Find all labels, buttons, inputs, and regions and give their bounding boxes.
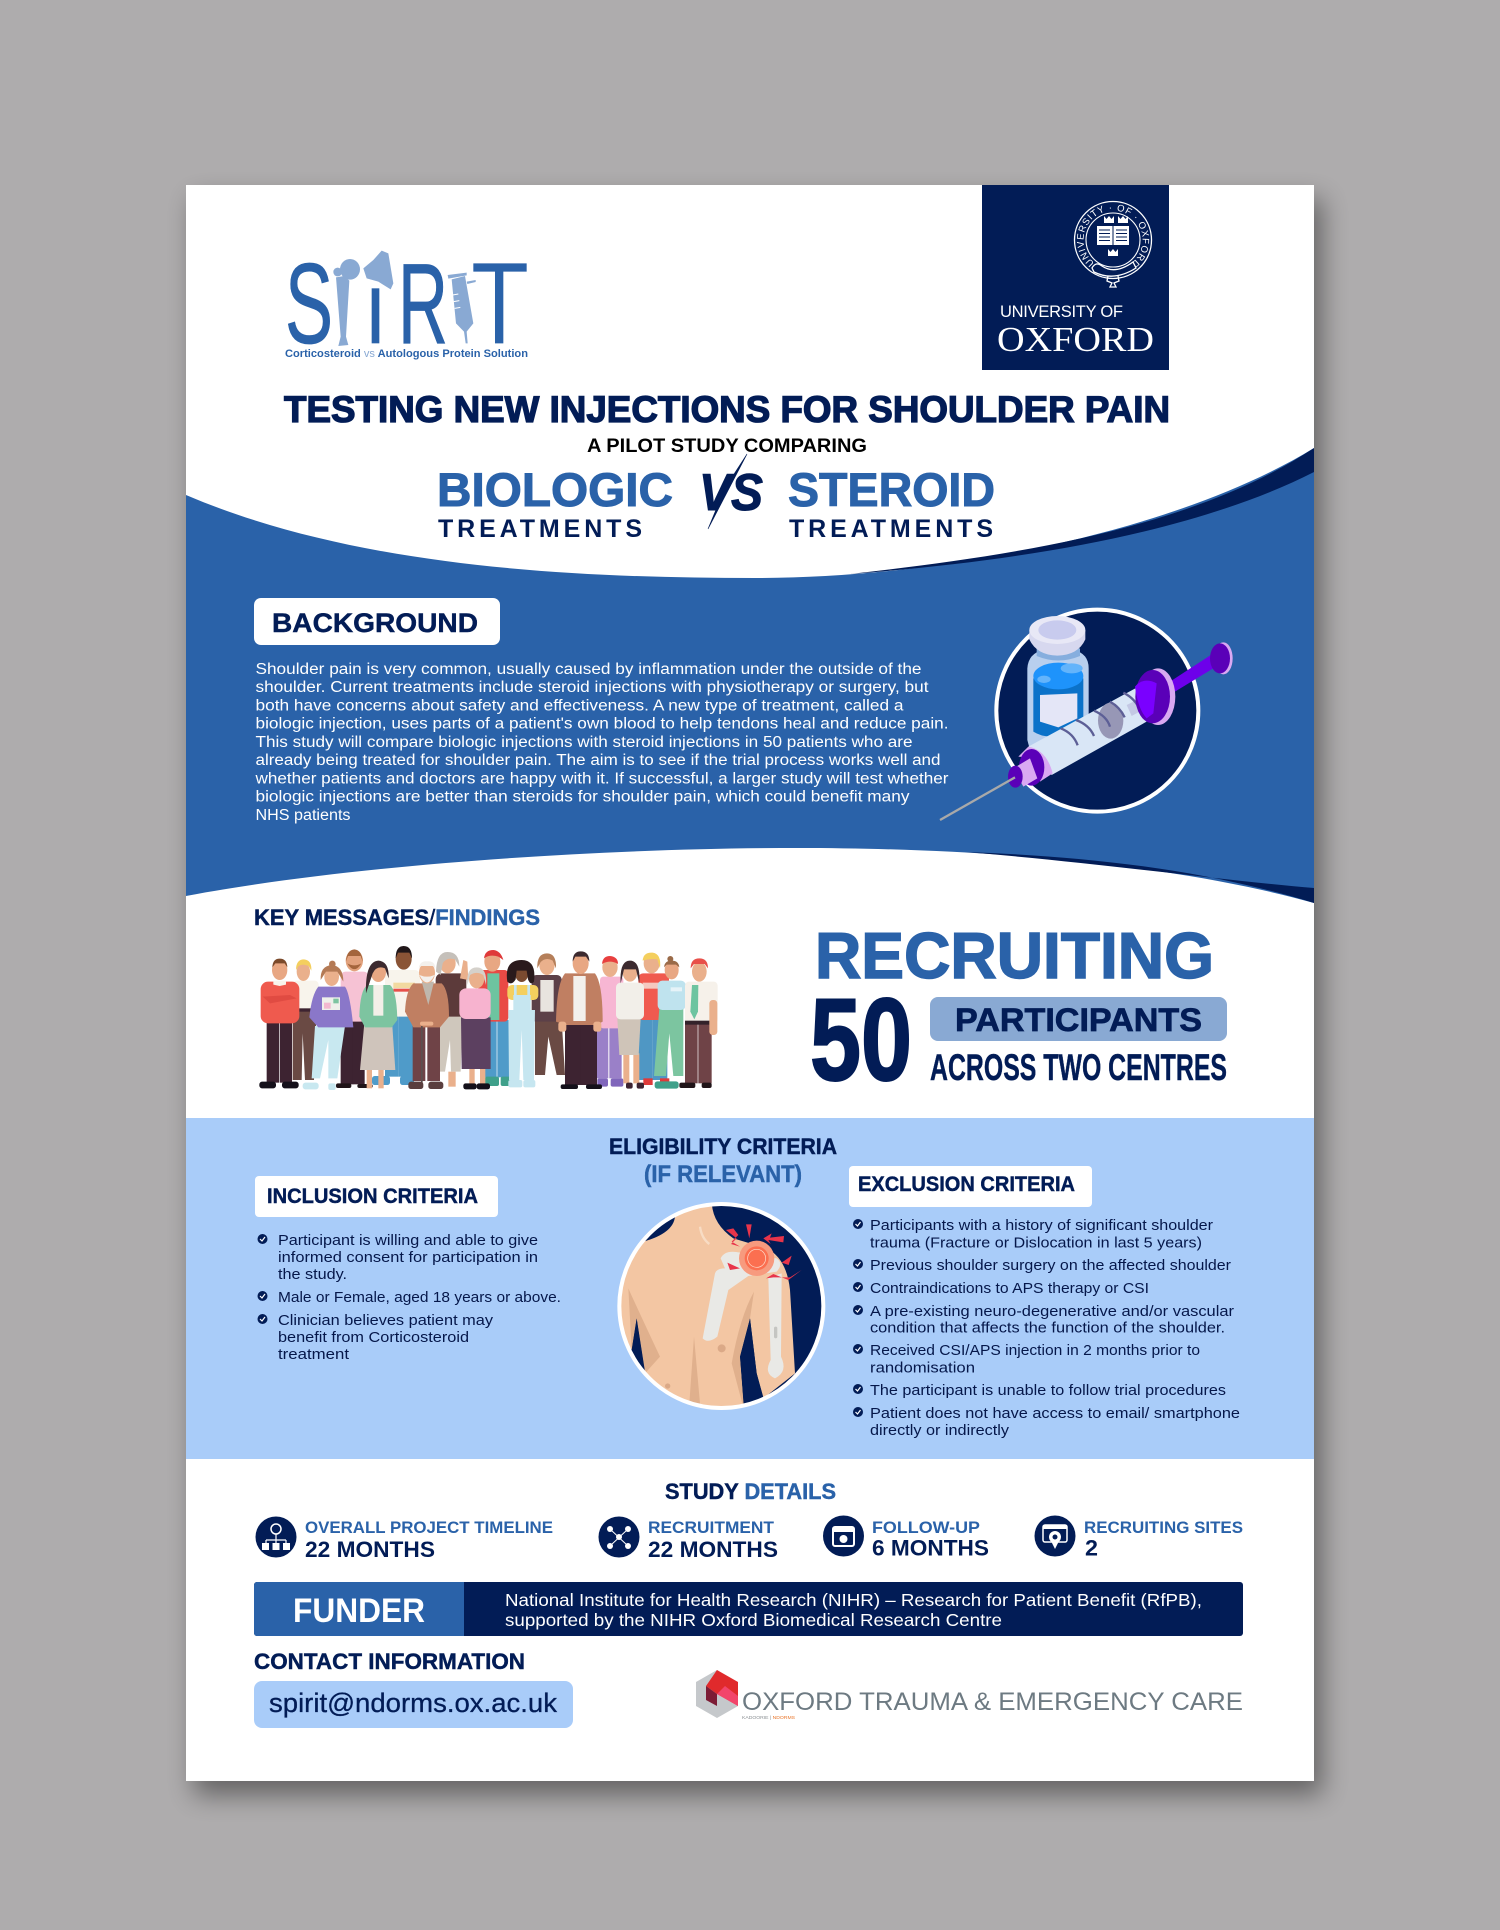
exclusion criteria: condition that affects the function of the shoulder. bbox=[870, 1320, 1225, 1336]
exclusion criteria: directly or indirectly bbox=[870, 1422, 1010, 1439]
logo: University of Oxford: OXFORD bbox=[997, 320, 1154, 359]
funder bar: FUNDER bbox=[293, 1592, 425, 1630]
heading: eligibility criteria: ELIGIBILITY CRITERIA bbox=[609, 1134, 837, 1159]
person: woman in dark cardigan bbox=[532, 953, 565, 1075]
stat: recruitment: RECRUITMENT bbox=[648, 1518, 775, 1537]
person: blonde woman in white blouse bbox=[293, 959, 319, 1080]
exclusion criteria: The participant is unable to follow trial procedures bbox=[870, 1382, 1226, 1399]
stat: follow-up: 6 MONTHS bbox=[872, 1536, 989, 1560]
inclusion criteria: INCLUSION CRITERIA bbox=[267, 1185, 478, 1208]
background body text: both have concerns about safety and effectiveness. A new type of treatment, called a bbox=[256, 698, 904, 714]
background body text bbox=[254, 661, 949, 824]
comparison heading: biologic vs steroid: BIOLOGIC bbox=[437, 463, 673, 516]
stat: recruitment: 22 MONTHS bbox=[648, 1537, 778, 1562]
inclusion criteria: Clinician believes patient may bbox=[278, 1312, 494, 1329]
logo: Oxford Trauma and Emergency Care: OXFORD TRAUMA & EMERGENCY CARE bbox=[742, 1688, 1243, 1716]
panel: background: BACKGROUND bbox=[272, 608, 478, 638]
inclusion criteria: Participant is willing and able to give bbox=[278, 1232, 538, 1249]
contact information bbox=[254, 1649, 573, 1728]
funder bar bbox=[254, 1582, 1243, 1636]
stat: recruiting sites: 2 bbox=[1085, 1536, 1098, 1560]
logo: Oxford Trauma and Emergency Care: KADOORIE | NDORMS bbox=[742, 1715, 795, 1720]
callout: recruiting 50 participants: ACROSS TWO CENTRES bbox=[930, 1047, 1227, 1088]
contact information: spirit@ndorms.ox.ac.uk bbox=[269, 1688, 558, 1718]
logo: SPIRIT bbox=[285, 241, 528, 368]
exclusion criteria: Previous shoulder surgery on the affected shoulder bbox=[870, 1257, 1231, 1274]
logo: SPIRIT: R bbox=[398, 241, 448, 368]
exclusion criteria: Participants with a history of significant shoulder bbox=[870, 1217, 1213, 1234]
contact information: CONTACT INFORMATION bbox=[254, 1649, 525, 1674]
person: man in brown jacket bbox=[556, 951, 603, 1089]
exclusion criteria bbox=[849, 1166, 1240, 1439]
stat: recruitment bbox=[598, 1516, 778, 1562]
exclusion criteria: EXCLUSION CRITERIA bbox=[858, 1173, 1075, 1196]
person: woman in overalls bbox=[507, 960, 538, 1087]
inclusion criteria: treatment bbox=[278, 1346, 350, 1363]
background body text: NHS patients bbox=[256, 807, 351, 824]
icon: bone, blade and syringe letterforms bbox=[333, 251, 527, 346]
funder bar: supported by the NIHR Oxford Biomedical Research Centre bbox=[505, 1610, 1002, 1630]
funder bar: National Institute for Health Research (NIHR) – Research for Patient Benefit (RfPB), bbox=[505, 1590, 1202, 1610]
logo: Oxford Trauma and Emergency Care bbox=[696, 1670, 1243, 1720]
stat: follow-up bbox=[823, 1516, 989, 1560]
icon: timeline bbox=[256, 1516, 296, 1558]
background body text: shoulder. Current treatments include steroid injections with physiotherapy or surgery, but bbox=[256, 679, 929, 696]
stat: recruiting sites bbox=[1034, 1516, 1243, 1560]
person: pink blouse purple trousers bbox=[596, 956, 623, 1087]
callout: recruiting 50 participants: 50 bbox=[810, 974, 912, 1105]
person: green cardigan woman bbox=[359, 961, 397, 1088]
icon: calendar bbox=[823, 1516, 864, 1556]
person: woman with pink blouse and plaid skirt bbox=[459, 967, 491, 1089]
stat: recruiting sites: RECRUITING SITES bbox=[1084, 1518, 1243, 1537]
background body text: biologic injections are better than steroids for shoulder pain, which could benefit many bbox=[256, 788, 910, 806]
subheading: if relevant: (IF RELEVANT) bbox=[644, 1161, 802, 1188]
illustration: shoulder pain bbox=[617, 1200, 823, 1413]
stat: overall project timeline: OVERALL PROJECT TIMELINE bbox=[305, 1518, 553, 1537]
background body text: biologic injection, uses parts of a patient's own blood to help tendons heal and reduce pain. bbox=[256, 716, 949, 733]
person: man with green tie bbox=[679, 958, 718, 1088]
background body text: whether patients and doctors are happy with it. If successful, a larger study will test whether bbox=[254, 770, 949, 787]
logo: SPIRIT: Corticosteroid vs Autologous Protein Solution bbox=[285, 348, 528, 360]
panel: background bbox=[254, 598, 949, 824]
stat: overall project timeline bbox=[256, 1516, 553, 1562]
person: woman with white blouse and beige skirt bbox=[616, 961, 644, 1089]
heading: study details: STUDY DETAILS bbox=[665, 1479, 836, 1504]
subtitle: A PILOT STUDY COMPARING bbox=[587, 436, 867, 457]
logo: University of Oxford: UNIVERSITY OF bbox=[1000, 303, 1123, 321]
inclusion criteria: Male or Female, aged 18 years or above. bbox=[278, 1289, 561, 1306]
person: pink shirt man bbox=[336, 949, 373, 1088]
person: woman in light blue top bbox=[654, 956, 686, 1089]
person: purple sweater woman bbox=[303, 961, 353, 1090]
stat: overall project timeline: 22 MONTHS bbox=[305, 1537, 435, 1562]
callout: recruiting 50 participants: RECRUITING bbox=[815, 919, 1214, 992]
icon: recruitment network bbox=[598, 1516, 640, 1558]
callout: recruiting 50 participants bbox=[810, 919, 1227, 1105]
comparison heading: biologic vs steroid: TREATMENTS bbox=[789, 515, 993, 543]
person: older man in tan jacket bbox=[405, 961, 449, 1089]
inclusion criteria: the study. bbox=[278, 1266, 347, 1283]
panel: eligibility criteria bbox=[186, 1118, 1314, 1459]
person: red shirt blonde man bbox=[638, 953, 669, 1085]
illustration: group of people bbox=[259, 946, 718, 1090]
poster card bbox=[186, 185, 1314, 1781]
exclusion criteria: Contraindications to APS therapy or CSI bbox=[870, 1280, 1149, 1297]
person: red cap man bbox=[478, 950, 514, 1086]
comparison heading: biologic vs steroid bbox=[437, 454, 995, 543]
logo: University of Oxford bbox=[982, 185, 1169, 370]
exclusion criteria: randomisation bbox=[870, 1360, 975, 1376]
exclusion criteria: A pre-existing neuro-degenerative and/or vascular bbox=[870, 1303, 1234, 1320]
crest: UNIVERSITY · OF · OXFORD bbox=[1076, 204, 1150, 268]
background body text: already being treated for shoulder pain. The aim is to see if the trial process works well and bbox=[256, 752, 940, 769]
icon: vial and syringe bbox=[940, 610, 1233, 820]
logo: SPIRIT: S bbox=[285, 241, 333, 368]
exclusion criteria: Patient does not have access to email/ smartphone bbox=[870, 1405, 1240, 1422]
inclusion criteria: benefit from Corticosteroid bbox=[278, 1329, 469, 1346]
exclusion criteria: trauma (Fracture or Dislocation in last 5 years) bbox=[870, 1234, 1202, 1252]
person: older woman bbox=[436, 952, 468, 1087]
heading: key messages: KEY MESSAGES/FINDINGS bbox=[254, 905, 540, 930]
background body text: This study will compare biologic injections with steroid injections in 50 patients who are bbox=[256, 734, 912, 751]
person: red sweater man bbox=[259, 959, 299, 1088]
comparison heading: biologic vs steroid: STEROID bbox=[788, 463, 995, 516]
blue background band bbox=[186, 448, 1314, 903]
comparison heading: biologic vs steroid: VS bbox=[699, 464, 763, 522]
stat: follow-up: FOLLOW-UP bbox=[872, 1518, 980, 1537]
comparison heading: biologic vs steroid: TREATMENTS bbox=[438, 515, 642, 543]
icon: location on screen bbox=[1034, 1516, 1076, 1556]
inclusion criteria bbox=[255, 1176, 561, 1363]
callout: recruiting 50 participants: PARTICIPANTS bbox=[955, 1002, 1202, 1038]
exclusion criteria: Received CSI/APS injection in 2 months prior to bbox=[870, 1342, 1200, 1359]
person: white shirt man bbox=[372, 946, 420, 1085]
background body text: Shoulder pain is very common, usually caused by inflammation under the outside of the bbox=[256, 661, 922, 678]
inclusion criteria: informed consent for participation in bbox=[278, 1249, 538, 1266]
title: TESTING NEW INJECTIONS FOR SHOULDER PAIN bbox=[284, 389, 1170, 430]
